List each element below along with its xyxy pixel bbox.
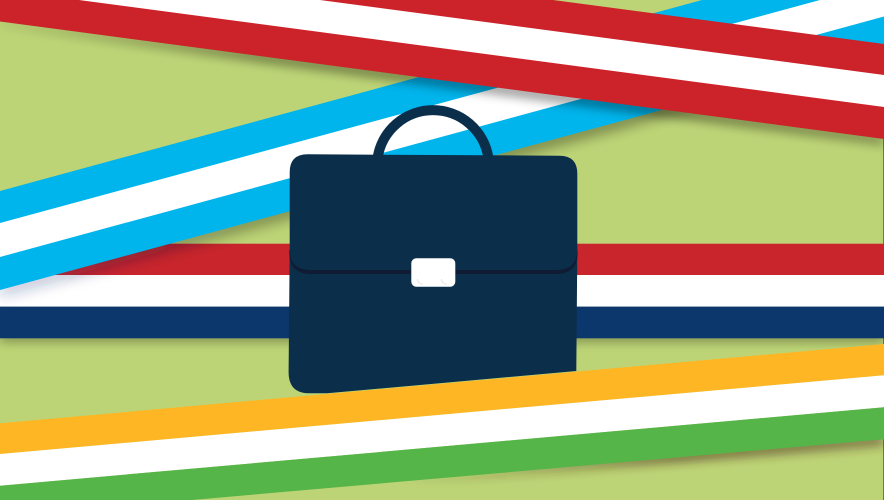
briefcase body <box>289 250 577 393</box>
right edge line <box>883 139 884 500</box>
briefcase clasp <box>411 258 455 287</box>
ribbon: orange white green <box>0 344 884 500</box>
ribbon: diagonal red white red <box>0 0 884 146</box>
icon: briefcase <box>289 110 578 393</box>
flap shadow line <box>289 250 578 274</box>
ribbon: horizontal red white navy <box>0 244 884 342</box>
briefcase handle <box>378 110 488 158</box>
ribbon: diagonal blue white blue <box>0 0 884 296</box>
briefcase flap <box>290 154 577 270</box>
